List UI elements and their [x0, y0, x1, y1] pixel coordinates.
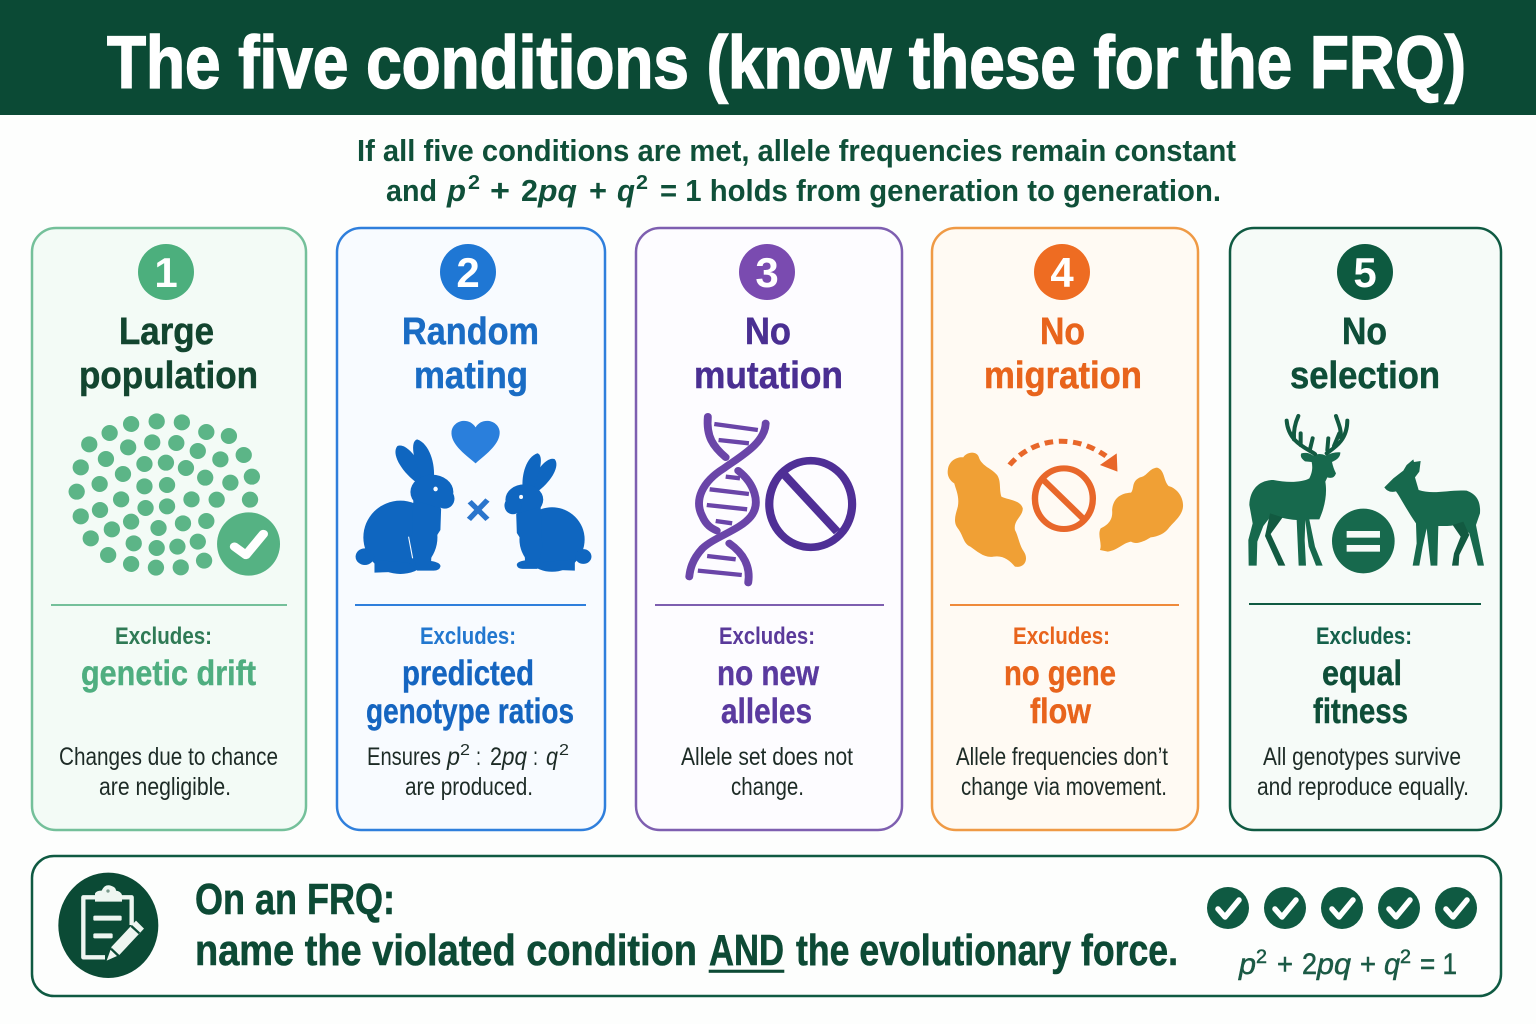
description: q [546, 743, 558, 771]
subtitle: + [589, 173, 607, 208]
formula: + [1360, 948, 1376, 981]
description [1257, 743, 1469, 801]
formula: 2 [1302, 948, 1317, 981]
excluded term: genetic drift [81, 654, 256, 693]
five check marks [1207, 887, 1477, 929]
heading: random mating: mating [414, 355, 528, 397]
description: and reproduce equally. [1257, 773, 1469, 801]
excluded term: genotype ratios [366, 692, 574, 731]
description: 2 [460, 742, 470, 759]
number badge 4 [1034, 244, 1090, 300]
description: Allele set does not [681, 743, 853, 771]
icon: clipboard and pencil [58, 873, 158, 978]
icon: population dots with check [69, 413, 280, 576]
excludes label: Excludes: [420, 623, 516, 650]
number badge 3 [739, 244, 795, 300]
icon: rabbits with heart [356, 421, 591, 574]
heading: random mating: Random [402, 311, 539, 353]
description: 2 [490, 743, 502, 771]
panel: FRQ callout [32, 856, 1501, 996]
formula: 2 [1256, 947, 1267, 968]
subtitle: p [446, 173, 466, 208]
heading: no mutation: mutation [694, 355, 843, 397]
title banner [0, 0, 1536, 115]
number badge 5: 5 [1353, 249, 1377, 296]
description [956, 743, 1168, 801]
heading: no migration: migration [984, 355, 1142, 397]
excluded term: predicted [402, 654, 534, 693]
excluded term: flow [1030, 692, 1092, 731]
description: All genotypes survive [1263, 743, 1461, 771]
excluded term: alleles [721, 692, 812, 731]
description [59, 743, 278, 801]
heading: random mating [402, 311, 539, 397]
icon: populations with blocked migration arrow [948, 441, 1183, 567]
subtitle: q [617, 173, 635, 208]
description: are produced. [405, 773, 533, 801]
heading: large population: Large [119, 311, 214, 353]
panel: large population [32, 228, 306, 830]
excluded term: no gene [1004, 654, 1116, 693]
formula: = 1 [1420, 948, 1457, 981]
subtitle [357, 133, 1236, 208]
excluded term [1313, 654, 1408, 731]
heading: no mutation: No [745, 311, 791, 353]
excluded term: fitness [1313, 692, 1408, 731]
callout text: the evolutionary force. [796, 926, 1178, 975]
callout text: AND [709, 926, 784, 975]
formula: pq [1316, 948, 1351, 981]
formula: q [1384, 948, 1400, 981]
excluded term [366, 654, 574, 731]
subtitle: 2 [468, 172, 480, 194]
panel: no selection [1230, 228, 1501, 830]
heading: no selection [1290, 311, 1440, 397]
panel: random mating [337, 228, 605, 830]
excludes label: Excludes: [1316, 623, 1412, 650]
callout text [195, 875, 1178, 975]
subtitle: 2 [521, 173, 538, 208]
description: change. [731, 773, 804, 801]
callout text: name the violated condition [195, 926, 697, 975]
heading: no mutation [694, 311, 843, 397]
number badge 3: 3 [755, 249, 779, 296]
description: : [476, 743, 481, 771]
icon: DNA with prohibition sign [689, 417, 852, 583]
formula: + [1277, 948, 1293, 981]
number badge 2: 2 [456, 249, 480, 296]
subtitle: pq [537, 173, 577, 208]
excludes label: Excludes: [1013, 623, 1110, 650]
formula [1238, 947, 1457, 981]
excluded term [1004, 654, 1116, 731]
description [681, 743, 853, 801]
subtitle: + [490, 173, 510, 208]
description: p [446, 743, 460, 771]
description: Allele frequencies don’t [956, 743, 1168, 771]
subtitle: = 1 holds from generation to generation. [660, 173, 1221, 208]
subtitle: and [386, 173, 437, 208]
description: Changes due to chance [59, 743, 278, 771]
heading: no migration: No [1040, 311, 1085, 353]
panel: no migration [932, 228, 1198, 830]
description: : [533, 743, 538, 771]
formula: 2 [1400, 947, 1411, 968]
formula: p [1238, 948, 1256, 981]
description: are negligible. [99, 773, 231, 801]
excluded term [717, 654, 820, 731]
excludes label: Excludes: [719, 623, 815, 650]
heading: large population [79, 311, 258, 397]
description: change via movement. [961, 773, 1167, 801]
icon: stag and doe with equals sign [1248, 416, 1484, 573]
description: 2 [559, 742, 569, 759]
heading: large population: population [79, 355, 258, 397]
number badge 4: 4 [1050, 249, 1074, 296]
heading: no migration [984, 311, 1142, 397]
subtitle: If all five conditions are met, allele frequencies remain constant [357, 133, 1236, 168]
heading: no selection: No [1342, 311, 1387, 353]
excluded term: equal [1322, 654, 1402, 693]
panel: no mutation [636, 228, 902, 830]
number badge 2 [440, 244, 496, 300]
number badge 1 [138, 244, 194, 300]
description [367, 742, 569, 801]
excludes label: Excludes: [115, 623, 212, 650]
heading: no selection: selection [1290, 355, 1440, 397]
callout text: On an FRQ: [195, 875, 395, 924]
description: pq [501, 743, 527, 771]
excluded term: no new [717, 654, 820, 693]
number badge 5 [1337, 244, 1393, 300]
description: Ensures [367, 743, 441, 771]
number badge 1: 1 [154, 249, 178, 296]
subtitle: 2 [636, 172, 648, 194]
